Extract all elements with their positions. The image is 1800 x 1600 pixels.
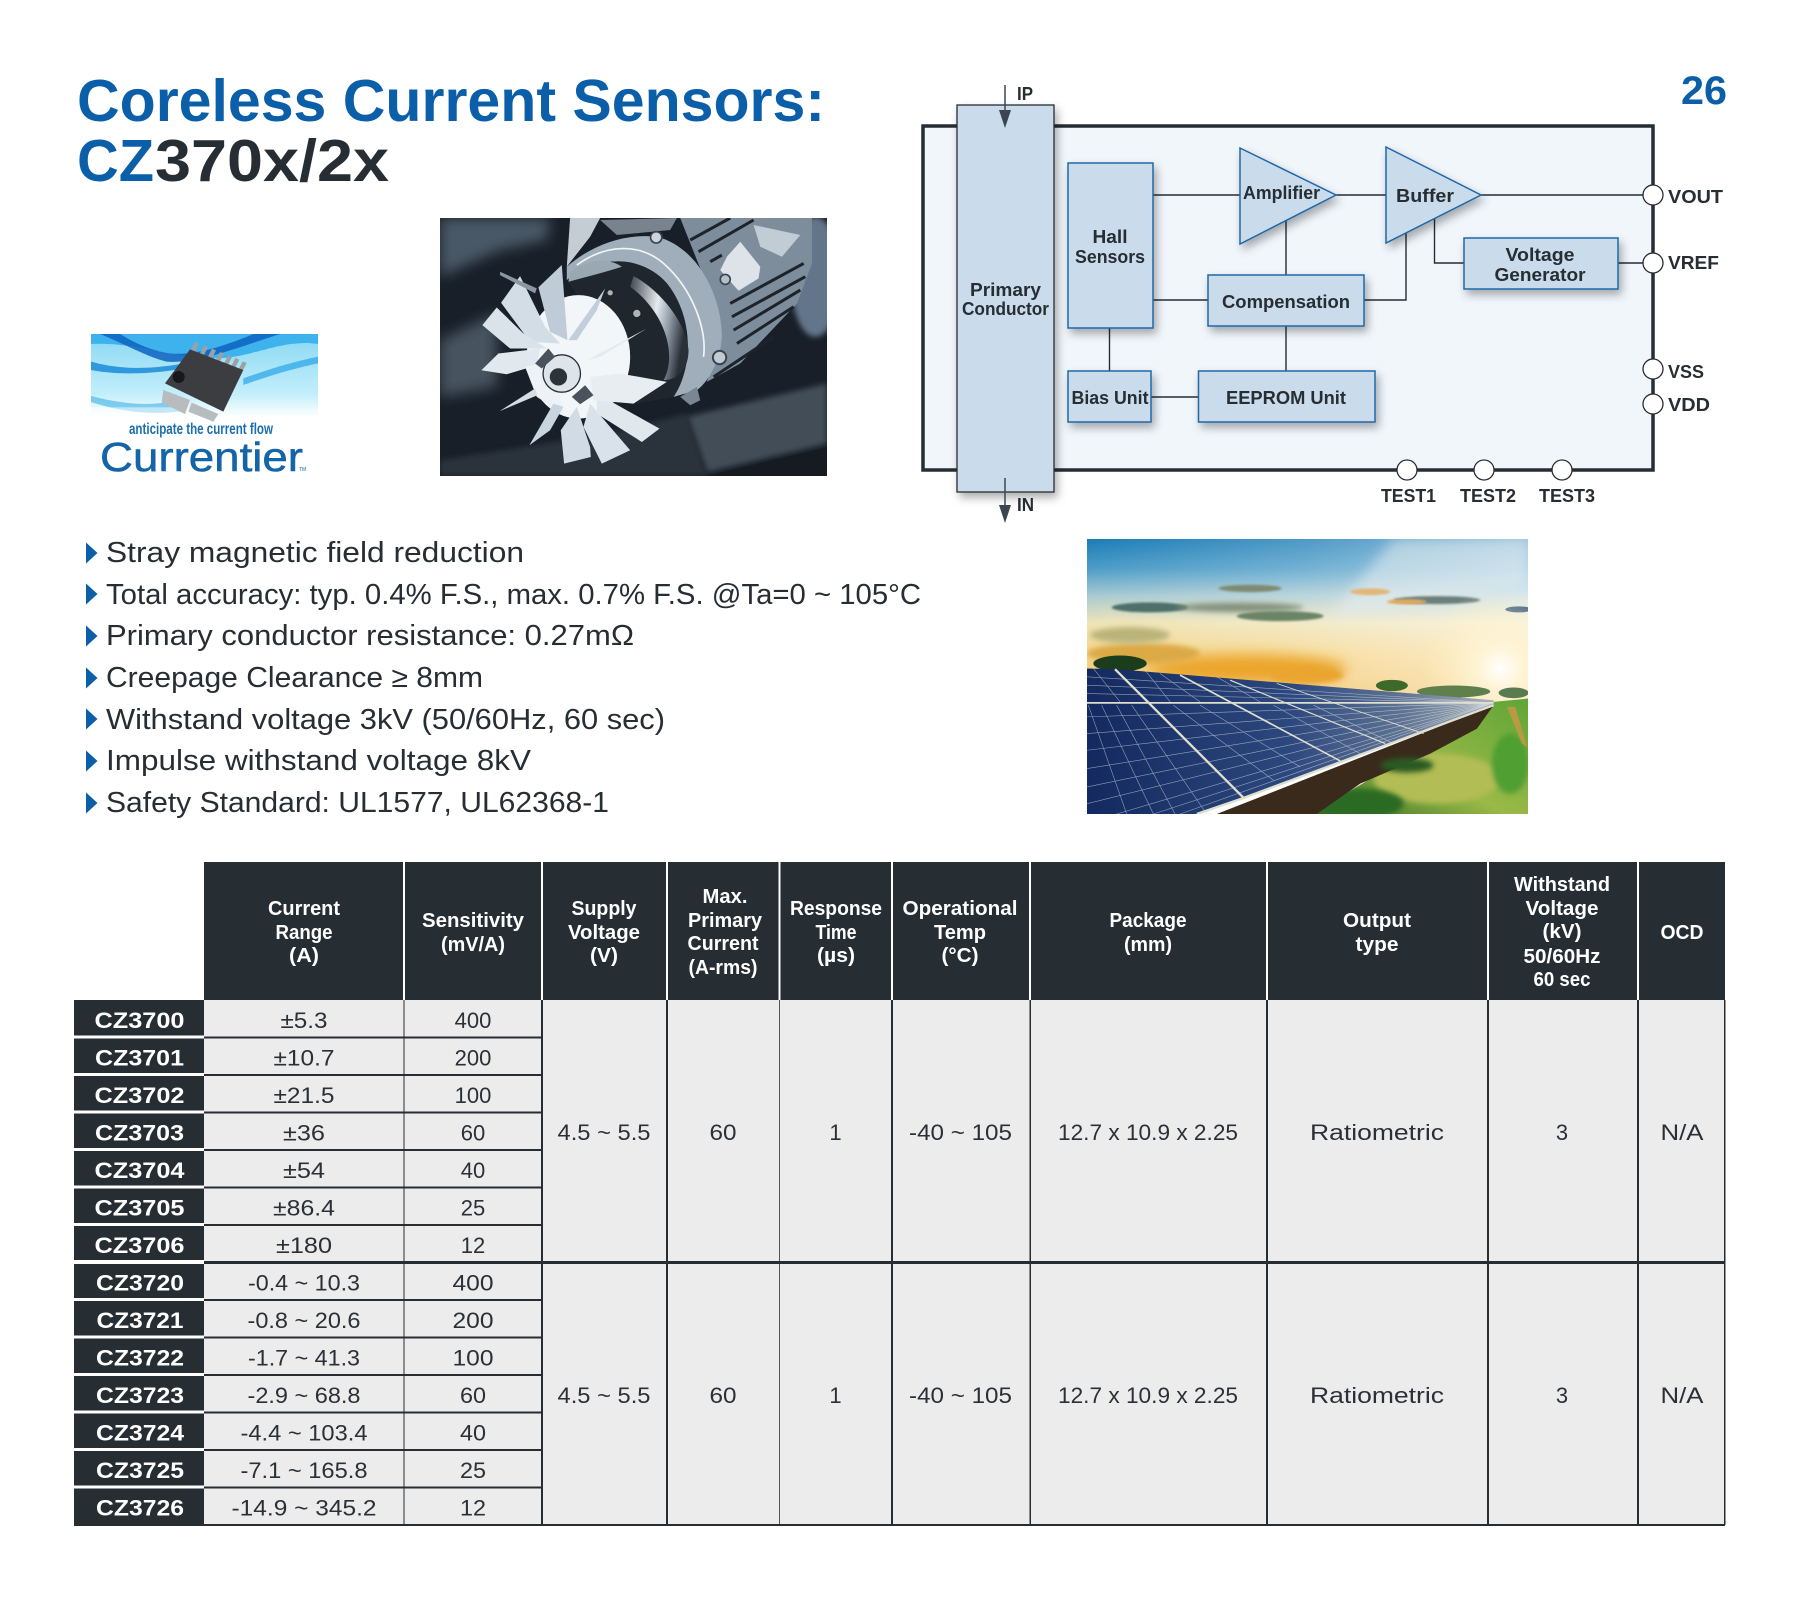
row CZ3725: 25 xyxy=(460,1458,486,1483)
row CZ3704: ±54 xyxy=(283,1158,325,1183)
row CZ3706 xyxy=(74,1226,485,1260)
arrow: IP in: IP xyxy=(1017,84,1033,104)
header: output type: type xyxy=(1356,934,1398,956)
block: compensation: Compensation xyxy=(1222,292,1350,312)
header: OCD: OCD xyxy=(1660,922,1704,944)
row CZ3723 xyxy=(74,1376,486,1410)
shared specs: CZ372x group: 12.7 x 10.9 x 2.25 xyxy=(1058,1383,1238,1408)
shared specs: CZ372x group: 4.5 ~ 5.5 xyxy=(558,1383,650,1408)
block diagram xyxy=(923,84,1723,523)
header: response time xyxy=(790,898,882,967)
output pins xyxy=(1643,185,1723,415)
output pins: VOUT xyxy=(1668,187,1723,207)
primary conductor: Primary xyxy=(970,280,1041,300)
block: hall sensors: Sensors xyxy=(1075,247,1145,267)
chip xyxy=(162,342,247,422)
primary conductor xyxy=(957,105,1054,492)
shared specs: CZ372x group: Ratiometric xyxy=(1310,1383,1444,1408)
fan blades xyxy=(481,265,667,464)
block: compensation xyxy=(1208,275,1364,326)
row CZ3720: 400 xyxy=(452,1270,494,1296)
row CZ3723: CZ3723 xyxy=(96,1383,184,1408)
shared specs: CZ370x group: N/A xyxy=(1660,1120,1704,1145)
row CZ3703: CZ3703 xyxy=(95,1120,184,1146)
header: max primary current: (A-rms) xyxy=(688,957,758,979)
row CZ3725 xyxy=(74,1451,486,1486)
header: withstand voltage: Withstand xyxy=(1514,874,1610,896)
header: response time: (µs) xyxy=(817,945,855,967)
test pins xyxy=(1381,460,1595,506)
wiring xyxy=(1110,195,1643,397)
row CZ3701: 200 xyxy=(455,1046,491,1070)
bullet 7: Safety Standard: UL1577, UL62368-1 xyxy=(106,787,609,819)
row CZ3701: CZ3701 xyxy=(95,1046,184,1070)
block: hall sensors: Hall xyxy=(1092,227,1128,247)
row CZ3724: CZ3724 xyxy=(96,1420,185,1446)
row CZ3700 xyxy=(74,1000,491,1036)
shared specs: CZ372x group: 1 xyxy=(829,1383,842,1408)
header: supply voltage xyxy=(568,898,640,967)
header: withstand voltage: 50/60Hz xyxy=(1524,946,1600,968)
title: Coreless Current Sensors: xyxy=(77,68,825,134)
block: EEPROM unit xyxy=(1198,371,1375,422)
grass xyxy=(1314,699,1529,819)
block: EEPROM unit: EEPROM Unit xyxy=(1226,388,1346,408)
row CZ3702: ±21.5 xyxy=(274,1083,334,1108)
fan hub xyxy=(535,349,593,404)
title: 370x/2x xyxy=(155,128,389,194)
shared specs: CZ370x group xyxy=(558,1120,1704,1145)
shared specs: CZ372x group xyxy=(558,1383,1704,1408)
row CZ3721 xyxy=(74,1301,494,1336)
trees xyxy=(1093,655,1529,698)
row CZ3705 xyxy=(74,1188,485,1223)
test pins: TEST3 xyxy=(1539,486,1595,506)
logo: Currentier xyxy=(91,334,318,480)
bullet 3: Primary conductor resistance: 0.27mΩ xyxy=(106,620,634,652)
row CZ3720: CZ3720 xyxy=(96,1270,184,1296)
shared specs: CZ370x group: 4.5 ~ 5.5 xyxy=(558,1120,650,1145)
row CZ3725: CZ3725 xyxy=(96,1458,184,1483)
row CZ3723: -2.9 ~ 68.8 xyxy=(248,1383,360,1408)
header: sensitivity: (mV/A) xyxy=(441,934,505,956)
row CZ3724 xyxy=(74,1414,486,1448)
row CZ3724: 40 xyxy=(460,1420,486,1446)
header: sensitivity xyxy=(422,910,525,956)
shared specs: CZ370x group: -40 ~ 105 xyxy=(909,1120,1012,1145)
header: output type xyxy=(1343,910,1411,956)
test pins: TEST1 xyxy=(1381,486,1436,506)
header: operational temp xyxy=(902,898,1018,967)
logo banner with chip xyxy=(91,334,318,422)
bullet 6: Impulse withstand voltage 8kV xyxy=(106,745,532,777)
row CZ3726 xyxy=(74,1488,486,1526)
output pins: VREF xyxy=(1668,253,1719,273)
shared specs: CZ372x group: 60 xyxy=(710,1383,736,1408)
output pins: VDD xyxy=(1668,395,1710,415)
header: withstand voltage: (kV) xyxy=(1542,921,1582,943)
header: output type: Output xyxy=(1343,910,1411,932)
header: operational temp: Temp xyxy=(934,922,986,944)
row CZ3726: 12 xyxy=(460,1496,486,1520)
row CZ3721: -0.8 ~ 20.6 xyxy=(248,1308,360,1333)
row CZ3721: 200 xyxy=(452,1308,494,1333)
motor cooling fins xyxy=(567,218,812,382)
test pins: TEST2 xyxy=(1460,486,1516,506)
bullet 4: Creepage Clearance ≥ 8mm xyxy=(106,662,483,694)
arrow: IN out xyxy=(999,478,1034,523)
specification table xyxy=(74,862,1726,1526)
shared specs: CZ372x group: -40 ~ 105 xyxy=(909,1383,1012,1408)
row CZ3702 xyxy=(74,1076,491,1110)
header: response time: Time xyxy=(816,922,856,944)
feature list xyxy=(86,537,921,819)
solar panel array xyxy=(1087,668,1494,814)
row CZ3722: CZ3722 xyxy=(96,1346,184,1370)
logo trademark: TM xyxy=(299,467,306,473)
sensor package frame xyxy=(923,126,1653,470)
panel support shadow xyxy=(1217,705,1494,814)
header: current range: Range xyxy=(276,922,332,944)
row CZ3725: -7.1 ~ 165.8 xyxy=(240,1458,368,1483)
header: supply voltage: Voltage xyxy=(568,922,640,944)
block: voltage generator: Voltage xyxy=(1506,245,1574,265)
logo tagline: anticipate the current flow xyxy=(129,421,273,438)
bullet 5: Withstand voltage 3kV (50/60Hz, 60 sec) xyxy=(106,704,665,736)
row CZ3703 xyxy=(74,1114,485,1148)
header: withstand voltage: 60 sec xyxy=(1534,969,1590,991)
bullet 2: Total accuracy: typ. 0.4% F.S., max. 0.7% F.S. @Ta=0 ~ 105°C xyxy=(106,579,921,611)
header: max primary current: Primary xyxy=(688,910,763,932)
header: current range: (A) xyxy=(289,945,319,967)
row CZ3703: ±36 xyxy=(283,1120,325,1146)
header: max primary current xyxy=(688,886,763,979)
row CZ3700: ±5.3 xyxy=(280,1008,328,1033)
row CZ3703: 60 xyxy=(461,1120,485,1146)
row CZ3726: -14.9 ~ 345.2 xyxy=(232,1496,376,1520)
row CZ3704 xyxy=(74,1151,485,1186)
primary conductor: Conductor xyxy=(962,299,1049,319)
header: response time: Response xyxy=(790,898,882,920)
output pins: VSS xyxy=(1668,362,1704,382)
row CZ3706: ±180 xyxy=(276,1233,332,1258)
header: supply voltage: Supply xyxy=(572,898,637,920)
header: current range xyxy=(268,898,340,967)
block: buffer xyxy=(1386,147,1481,243)
logo wordmark: Currentier xyxy=(100,434,303,480)
header: package: (mm) xyxy=(1124,934,1172,956)
arrow: IP in xyxy=(999,84,1033,128)
header: withstand voltage xyxy=(1514,874,1610,991)
row CZ3706: 12 xyxy=(461,1233,485,1258)
row CZ3721: CZ3721 xyxy=(96,1308,184,1333)
row CZ3701 xyxy=(74,1038,491,1073)
title: CZ xyxy=(77,128,154,194)
header: operational temp: Operational xyxy=(902,898,1018,920)
row CZ3720: -0.4 ~ 10.3 xyxy=(248,1270,360,1296)
row CZ3704: CZ3704 xyxy=(94,1158,185,1183)
row CZ3726: CZ3726 xyxy=(96,1496,184,1520)
row CZ3722 xyxy=(74,1338,494,1373)
row CZ3722: -1.7 ~ 41.3 xyxy=(248,1346,360,1370)
block: buffer: Buffer xyxy=(1396,186,1454,206)
row CZ3702: CZ3702 xyxy=(94,1083,184,1108)
block: bias unit: Bias Unit xyxy=(1072,388,1149,408)
block: amplifier: Amplifier xyxy=(1243,183,1320,203)
photo: electric motor with fan xyxy=(440,218,827,476)
shared specs: CZ370x group: 1 xyxy=(829,1120,842,1145)
shared specs: CZ372x group: N/A xyxy=(1660,1383,1704,1408)
header: package: Package xyxy=(1110,910,1186,932)
shared specs: CZ372x group: 3 xyxy=(1556,1383,1568,1408)
header: max primary current: Max. xyxy=(702,886,748,908)
row CZ3705: ±86.4 xyxy=(273,1196,335,1220)
row CZ3724: -4.4 ~ 103.4 xyxy=(240,1420,368,1446)
row CZ3704: 40 xyxy=(461,1158,485,1183)
arrow: IN out: IN xyxy=(1017,495,1034,515)
motor ring housing xyxy=(567,232,730,405)
shared specs: CZ370x group: Ratiometric xyxy=(1310,1120,1444,1145)
row CZ3723: 60 xyxy=(460,1383,486,1408)
row CZ3701: ±10.7 xyxy=(274,1046,334,1070)
header: current range: Current xyxy=(268,898,340,920)
photo: solar panels at sunset xyxy=(1087,539,1528,814)
table backgrounds xyxy=(74,862,1726,1526)
row CZ3705: CZ3705 xyxy=(94,1196,184,1220)
row CZ3700: CZ3700 xyxy=(94,1008,184,1033)
header: withstand voltage: Voltage xyxy=(1526,898,1598,920)
page number: 26 xyxy=(1681,69,1727,113)
shared specs: CZ370x group: 3 xyxy=(1556,1120,1568,1145)
shared specs: CZ370x group: 12.7 x 10.9 x 2.25 xyxy=(1058,1120,1238,1145)
header: operational temp: (°C) xyxy=(942,945,978,967)
row CZ3722: 100 xyxy=(452,1346,494,1370)
row CZ3702: 100 xyxy=(455,1083,491,1108)
block: amplifier xyxy=(1240,148,1336,244)
block: hall sensors xyxy=(1068,163,1153,328)
row CZ3706: CZ3706 xyxy=(94,1233,184,1258)
block: voltage generator xyxy=(1464,238,1618,289)
header: package xyxy=(1110,910,1186,956)
title xyxy=(77,68,825,194)
block: voltage generator: Generator xyxy=(1494,265,1586,285)
header: max primary current: Current xyxy=(688,933,759,955)
header: sensitivity: Sensitivity xyxy=(422,910,525,932)
row CZ3705: 25 xyxy=(461,1196,485,1220)
row CZ3720 xyxy=(74,1264,494,1298)
header: supply voltage: (V) xyxy=(590,945,618,967)
block: bias unit xyxy=(1068,371,1151,422)
row CZ3700: 400 xyxy=(455,1008,491,1033)
shared specs: CZ370x group: 60 xyxy=(710,1120,736,1145)
bullet 1: Stray magnetic field reduction xyxy=(106,537,524,569)
